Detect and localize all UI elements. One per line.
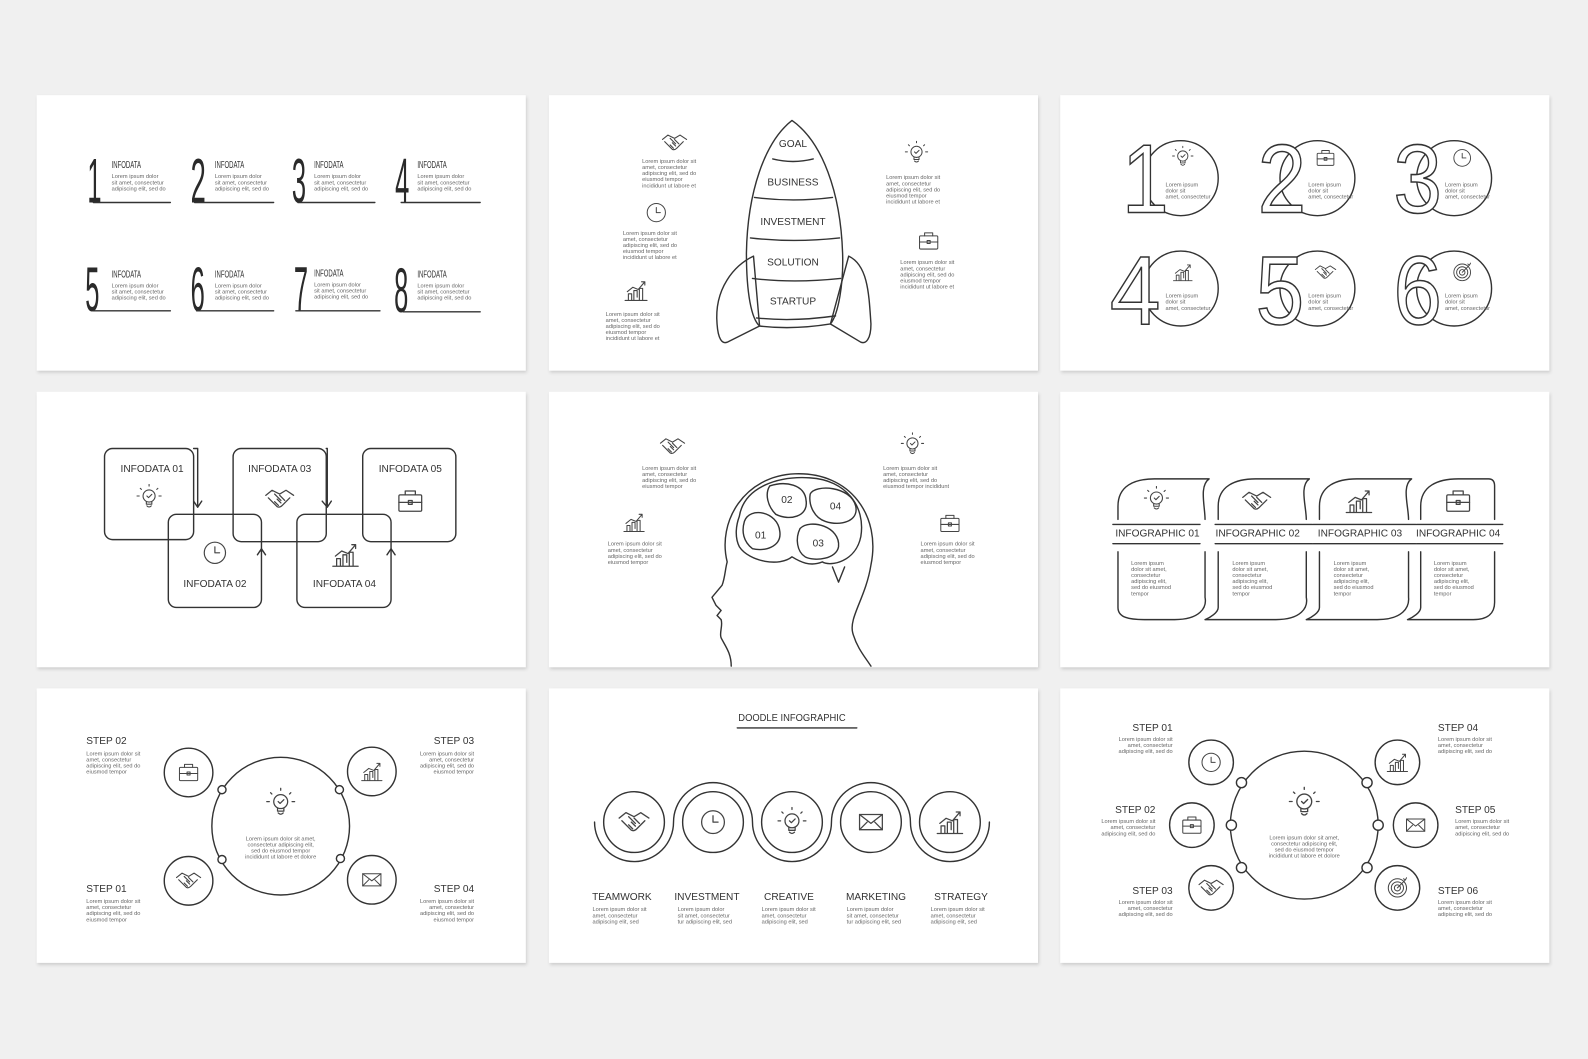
text: briefcase: Lorem ipsum dolor sit bbox=[921, 542, 975, 548]
icon: bulb with text bbox=[886, 141, 941, 205]
number 1: Lorem ipsum bbox=[1166, 182, 1199, 188]
box 02 bbox=[168, 514, 261, 607]
labels: Lorem ipsum dolor sit bbox=[762, 907, 816, 913]
item 1: adipiscing elit, sed do bbox=[112, 186, 166, 192]
central circle: consectetur adipiscing elit, bbox=[248, 842, 314, 848]
tab 01: dolor sit amet, bbox=[1131, 567, 1167, 573]
panel: infodata boxes bbox=[37, 392, 526, 667]
text: chart: adipiscing elit, sed do bbox=[608, 554, 662, 560]
step labels: Lorem ipsum dolor sit bbox=[1438, 900, 1492, 906]
icon: clock with text: amet, consectetur bbox=[623, 237, 668, 243]
text: briefcase: eiusmod tempor bbox=[921, 560, 961, 566]
item 3: INFODATA bbox=[314, 160, 344, 171]
step labels: adipiscing elit, sed do bbox=[1455, 831, 1509, 837]
panel: head with brain bbox=[549, 392, 1038, 667]
step labels: STEP 05 bbox=[1455, 805, 1496, 816]
rocket shape bbox=[717, 120, 871, 343]
number 4: amet, consectetur bbox=[1166, 306, 1211, 312]
box 03: INFODATA 03 bbox=[248, 464, 312, 475]
text: handshake bbox=[642, 439, 697, 490]
tab 04: INFOGRAPHIC 04 bbox=[1416, 529, 1501, 540]
icon: handshake with text: amet, consectetur bbox=[642, 165, 687, 171]
icon: chart with text: Lorem ipsum dolor sit bbox=[606, 312, 660, 318]
icon: briefcase with text: eiusmod tempor bbox=[900, 278, 941, 284]
tab 02: Lorem ipsum bbox=[1232, 561, 1265, 567]
labels: amet, consectetur bbox=[931, 913, 976, 919]
arrows bbox=[194, 449, 395, 555]
item 2: Lorem ipsum dolor bbox=[215, 174, 262, 180]
item 6: sit amet, consectetur bbox=[215, 290, 267, 296]
panel: outlined numbers 1-6 bbox=[1060, 95, 1549, 371]
step labels: Lorem ipsum dolor sit bbox=[1119, 900, 1173, 906]
step labels: amet, consectetur bbox=[1128, 906, 1173, 912]
number 2: dolor sit bbox=[1308, 188, 1329, 194]
tab 04: adipiscing elit, bbox=[1434, 579, 1470, 585]
item 3: 3 bbox=[292, 146, 306, 216]
text: chart: Lorem ipsum dolor sit bbox=[608, 542, 662, 548]
step labels: STEP 02 bbox=[1115, 805, 1156, 816]
step labels: amet, consectetur bbox=[429, 905, 474, 911]
item 7: sit amet, consectetur bbox=[314, 289, 366, 295]
rocket shape: INVESTMENT bbox=[760, 217, 826, 228]
item 2: INFODATA bbox=[215, 160, 244, 171]
tab 01: INFOGRAPHIC 01 bbox=[1115, 529, 1200, 540]
text: bulb: adipiscing elit, sed do bbox=[883, 478, 937, 484]
icon: briefcase with text bbox=[900, 233, 955, 291]
step labels: STEP 06 bbox=[1438, 886, 1479, 897]
step labels: STEP 04 bbox=[434, 884, 474, 895]
text: handshake: Lorem ipsum dolor sit bbox=[642, 466, 697, 472]
item 6: INFODATA bbox=[215, 269, 244, 280]
step labels: eiusmod tempor bbox=[434, 769, 474, 775]
number 3: 3 bbox=[1393, 125, 1442, 234]
item 2: sit amet, consectetur bbox=[215, 180, 267, 186]
head outline: 03 bbox=[813, 539, 824, 550]
rocket shape: SOLUTION bbox=[767, 257, 819, 268]
icon: clock with text: eiusmod tempor bbox=[623, 249, 664, 255]
tab 03: tempor bbox=[1334, 591, 1351, 597]
central circle bbox=[1226, 751, 1383, 899]
step labels: Lorem ipsum dolor sit bbox=[1119, 737, 1173, 743]
icon: clock with text: incididunt ut labore et bbox=[623, 255, 677, 261]
labels: Lorem ipsum dolor bbox=[678, 907, 725, 913]
tab 01: tempor bbox=[1131, 591, 1149, 597]
item 5 bbox=[85, 255, 170, 325]
icon: bulb with text: amet, consectetur bbox=[886, 181, 931, 187]
number 2: amet, consectetur bbox=[1308, 194, 1353, 200]
step labels: Lorem ipsum dolor sit bbox=[420, 751, 474, 757]
step labels: adipiscing elit, sed do bbox=[1119, 912, 1173, 918]
icon: briefcase with text: amet, consectetur bbox=[900, 266, 945, 272]
step labels: STEP 04 bbox=[1438, 723, 1479, 734]
item 1 bbox=[87, 146, 170, 216]
icon circles bbox=[164, 747, 396, 905]
panel: four steps cycle bbox=[37, 688, 526, 963]
icon: bulb with text: Lorem ipsum dolor sit bbox=[886, 175, 941, 181]
icon circles bbox=[604, 792, 980, 852]
step labels: amet, consectetur bbox=[1438, 743, 1483, 749]
central circle bbox=[212, 757, 350, 895]
step labels: STEP 02 bbox=[86, 736, 127, 747]
step labels: adipiscing elit, sed do bbox=[86, 911, 140, 917]
item 3: Lorem ipsum dolor bbox=[314, 174, 361, 180]
wave line bbox=[595, 783, 989, 862]
rocket shape: BUSINESS bbox=[767, 177, 819, 188]
icon: handshake with text: eiusmod tempor bbox=[642, 177, 683, 183]
text: bulb: amet, consectetur bbox=[883, 472, 928, 478]
number 4: Lorem ipsum bbox=[1166, 294, 1199, 300]
labels: MARKETING bbox=[846, 892, 906, 903]
step labels bbox=[1101, 723, 1510, 918]
tab 04: sed do eiusmod bbox=[1434, 585, 1474, 591]
item 3: sit amet, consectetur bbox=[314, 180, 366, 186]
icon: clock with text: Lorem ipsum dolor sit bbox=[623, 231, 677, 237]
step labels: adipiscing elit, sed do bbox=[1101, 831, 1155, 837]
central circle: incididunt ut labore et dolore bbox=[1269, 854, 1340, 860]
step labels: STEP 01 bbox=[86, 884, 127, 895]
number 5: dolor sit bbox=[1308, 300, 1329, 306]
panel: six steps cycle bbox=[1060, 688, 1549, 963]
labels: amet, consectetur bbox=[762, 913, 807, 919]
text: briefcase bbox=[921, 515, 975, 566]
tab 02: consectetur bbox=[1232, 573, 1262, 579]
number 2 bbox=[1258, 125, 1353, 234]
head outline: 01 bbox=[755, 531, 767, 542]
labels: adipiscing elit, sed bbox=[762, 919, 808, 925]
item 5: adipiscing elit, sed do bbox=[112, 296, 166, 302]
item 8: INFODATA bbox=[417, 269, 447, 280]
icon: clock with text bbox=[623, 203, 677, 261]
icon: handshake with text: incididunt ut labore et bbox=[642, 183, 696, 189]
head outline: 04 bbox=[830, 501, 842, 512]
item 3: adipiscing elit, sed do bbox=[314, 186, 368, 192]
tab 03: dolor sit amet, bbox=[1334, 567, 1370, 573]
text: chart bbox=[608, 514, 662, 566]
text: chart: eiusmod tempor bbox=[608, 560, 648, 566]
text: briefcase: amet, consectetur bbox=[921, 548, 966, 554]
labels: amet, consectetur bbox=[593, 913, 638, 919]
number 1: dolor sit bbox=[1166, 188, 1186, 194]
step labels: amet, consectetur bbox=[1455, 825, 1500, 831]
rocket shape: GOAL bbox=[779, 139, 807, 150]
step labels: eiusmod tempor bbox=[86, 917, 127, 923]
step labels: amet, consectetur bbox=[1110, 825, 1156, 831]
item 4: sit amet, consectetur bbox=[417, 180, 470, 186]
number 2: 2 bbox=[1258, 125, 1306, 234]
box 04: INFODATA 04 bbox=[313, 579, 376, 590]
number 4 bbox=[1110, 236, 1211, 345]
item 7: INFODATA bbox=[314, 268, 344, 279]
step labels: amet, consectetur bbox=[429, 757, 474, 763]
number 1: 1 bbox=[1122, 125, 1169, 234]
item 7: Lorem ipsum dolor bbox=[314, 283, 361, 289]
number 5 bbox=[1256, 236, 1353, 345]
step labels: STEP 03 bbox=[1132, 886, 1173, 897]
step labels: amet, consectetur bbox=[86, 757, 131, 763]
tab 04: Lorem ipsum bbox=[1434, 561, 1467, 567]
step labels: Lorem ipsum dolor sit bbox=[86, 899, 141, 905]
labels: adipiscing elit, sed bbox=[593, 919, 639, 925]
text: handshake: amet, consectetur bbox=[642, 472, 687, 478]
labels: sit amet, consectetur bbox=[847, 913, 899, 919]
labels: adipiscing elit, sed bbox=[931, 919, 977, 925]
step labels: amet, consectetur bbox=[1128, 743, 1173, 749]
labels: CREATIVE bbox=[764, 892, 814, 903]
item 4 bbox=[395, 146, 480, 216]
item 4: adipiscing elit, sed do bbox=[417, 186, 471, 192]
tab 03: adipiscing elit, bbox=[1334, 579, 1370, 585]
step labels: adipiscing elit, sed do bbox=[1438, 749, 1492, 755]
number 6: Lorem ipsum bbox=[1445, 294, 1478, 300]
step labels: eiusmod tempor bbox=[434, 917, 474, 923]
box 02: INFODATA 02 bbox=[183, 579, 247, 590]
central circle: sed do eiusmod tempor bbox=[1275, 847, 1334, 853]
item 2: adipiscing elit, sed do bbox=[215, 186, 269, 192]
icon circles bbox=[1170, 740, 1438, 910]
panel: rocket bbox=[549, 95, 1038, 371]
central circle: Lorem ipsum dolor sit amet, bbox=[246, 836, 316, 842]
item 3 bbox=[292, 146, 375, 216]
item 1: INFODATA bbox=[112, 160, 141, 171]
tab 01: adipiscing elit, bbox=[1131, 579, 1167, 585]
tab 02: dolor sit amet, bbox=[1232, 567, 1268, 573]
head outline: 02 bbox=[781, 495, 793, 506]
rocket shape: STARTUP bbox=[770, 297, 816, 308]
number 6: 6 bbox=[1393, 236, 1442, 345]
text: bulb bbox=[883, 433, 950, 490]
step labels: Lorem ipsum dolor sit bbox=[420, 899, 474, 905]
tab 01 bbox=[1115, 479, 1209, 620]
labels: tur adipiscing elit, sed bbox=[678, 919, 732, 925]
item 6: adipiscing elit, sed do bbox=[215, 296, 269, 302]
central circle: incididunt ut labore et dolore bbox=[245, 855, 316, 861]
icon: bulb with text: eiusmod tempor bbox=[886, 193, 927, 199]
tab 02: INFOGRAPHIC 02 bbox=[1216, 529, 1300, 540]
tab 03: INFOGRAPHIC 03 bbox=[1318, 529, 1402, 540]
number 3: dolor sit bbox=[1445, 188, 1465, 194]
labels bbox=[592, 892, 988, 925]
head outline bbox=[712, 474, 873, 666]
item 8: sit amet, consectetur bbox=[417, 290, 470, 296]
step labels: eiusmod tempor bbox=[86, 769, 127, 775]
tab 03: Lorem ipsum bbox=[1334, 561, 1367, 567]
item 4: Lorem ipsum dolor bbox=[417, 174, 464, 180]
box 01: INFODATA 01 bbox=[121, 464, 184, 475]
icon: chart with text: eiusmod tempor bbox=[606, 330, 646, 336]
tab 04: tempor bbox=[1434, 591, 1452, 597]
step labels: adipiscing elit, sed do bbox=[1119, 749, 1173, 755]
tab 04: consectetur bbox=[1434, 573, 1463, 579]
icon: bulb with text: incididunt ut labore et bbox=[886, 199, 940, 205]
text: briefcase: adipiscing elit, sed do bbox=[921, 554, 975, 560]
panel: numbered infodata list bbox=[37, 95, 526, 371]
labels: TEAMWORK bbox=[592, 892, 652, 903]
step labels: amet, consectetur bbox=[1438, 906, 1483, 912]
item 4: INFODATA bbox=[417, 160, 447, 171]
number 5: amet, consectetur bbox=[1308, 306, 1353, 312]
step labels: Lorem ipsum dolor sit bbox=[86, 751, 141, 757]
item 2 bbox=[191, 146, 274, 216]
item 6: 6 bbox=[191, 255, 205, 325]
number 6 bbox=[1393, 236, 1490, 345]
item 7 bbox=[294, 255, 380, 325]
box 05 bbox=[363, 449, 456, 542]
text: handshake: eiusmod tempor bbox=[642, 484, 683, 490]
item 4: 4 bbox=[395, 146, 409, 216]
item 6 bbox=[191, 255, 274, 325]
number 3: amet, consectetur bbox=[1445, 194, 1490, 200]
central circle: sed do eiusmod tempor bbox=[251, 848, 310, 854]
item 5: Lorem ipsum dolor bbox=[112, 284, 159, 290]
number 6: dolor sit bbox=[1445, 300, 1465, 306]
item 1: Lorem ipsum dolor bbox=[112, 174, 159, 180]
number 4: dolor sit bbox=[1166, 300, 1186, 306]
item 8: adipiscing elit, sed do bbox=[417, 296, 471, 302]
item 8 bbox=[394, 256, 480, 326]
step labels: amet, consectetur bbox=[86, 905, 131, 911]
central circle: consectetur adipiscing elit, bbox=[1271, 841, 1338, 847]
icon: handshake with text: adipiscing elit, sed do bbox=[642, 171, 696, 177]
labels: Lorem ipsum dolor bbox=[847, 907, 894, 913]
number 3 bbox=[1393, 125, 1490, 234]
step labels: Lorem ipsum dolor sit bbox=[1455, 819, 1510, 825]
box 05: INFODATA 05 bbox=[379, 464, 442, 475]
item 5: INFODATA bbox=[112, 269, 141, 280]
item 7: adipiscing elit, sed do bbox=[314, 295, 368, 301]
tab 02: adipiscing elit, bbox=[1232, 579, 1268, 585]
number 2: Lorem ipsum bbox=[1308, 182, 1341, 188]
step labels: adipiscing elit, sed do bbox=[420, 911, 474, 917]
labels: Lorem ipsum dolor sit bbox=[593, 907, 647, 913]
labels: Lorem ipsum dolor sit bbox=[931, 907, 985, 913]
item 7: 7 bbox=[294, 255, 308, 325]
icon: briefcase with text: Lorem ipsum dolor sit bbox=[900, 260, 955, 266]
item 8: 8 bbox=[394, 256, 408, 326]
icon: chart with text: amet, consectetur bbox=[606, 318, 651, 324]
item 6: Lorem ipsum dolor bbox=[215, 284, 262, 290]
icon: handshake with text: Lorem ipsum dolor sit bbox=[642, 159, 697, 165]
item 2: 2 bbox=[191, 146, 206, 216]
text: bulb: Lorem ipsum dolor sit bbox=[883, 466, 938, 472]
labels: INVESTMENT bbox=[674, 892, 740, 903]
icon: chart with text: adipiscing elit, sed do bbox=[606, 324, 660, 330]
labels: sit amet, consectetur bbox=[678, 913, 730, 919]
number 3: Lorem ipsum bbox=[1445, 182, 1478, 188]
tab 01: sed do eiusmod bbox=[1131, 585, 1171, 591]
number 6: amet, consectetur bbox=[1445, 306, 1490, 312]
step labels: adipiscing elit, sed do bbox=[86, 763, 140, 769]
box 03 bbox=[233, 449, 326, 542]
tab 02: tempor bbox=[1232, 591, 1250, 597]
icon: handshake with text bbox=[642, 135, 697, 189]
step labels: adipiscing elit, sed do bbox=[420, 763, 474, 769]
item 8: Lorem ipsum dolor bbox=[417, 284, 464, 290]
icon: chart with text bbox=[606, 282, 660, 342]
tab 03 bbox=[1306, 479, 1412, 620]
number 1 bbox=[1122, 125, 1211, 234]
text: chart: amet, consectetur bbox=[608, 548, 653, 554]
tab 04: dolor sit amet, bbox=[1434, 567, 1470, 573]
tab 03: sed do eiusmod bbox=[1334, 585, 1374, 591]
text: bulb: eiusmod tempor incididunt bbox=[883, 484, 950, 490]
icon: chart with text: incididunt ut labore et bbox=[606, 336, 660, 342]
icon: clock with text: adipiscing elit, sed do bbox=[623, 243, 677, 249]
step labels bbox=[86, 736, 474, 923]
icon: briefcase with text: adipiscing elit, sed do bbox=[900, 272, 954, 278]
item 5: 5 bbox=[85, 255, 99, 325]
box 04 bbox=[297, 514, 391, 607]
tab 02 bbox=[1205, 479, 1309, 620]
step labels: Lorem ipsum dolor sit bbox=[1101, 819, 1156, 825]
item 5: sit amet, consectetur bbox=[112, 290, 164, 296]
tab 04 bbox=[1408, 479, 1501, 620]
labels: tur adipiscing elit, sed bbox=[847, 919, 901, 925]
number 5: Lorem ipsum bbox=[1308, 294, 1341, 300]
item 1: 1 bbox=[87, 146, 101, 216]
number 1: amet, consectetur bbox=[1166, 194, 1211, 200]
number 5: 5 bbox=[1256, 236, 1304, 345]
title: DOODLE INFOGRAPHIC bbox=[738, 713, 846, 724]
panel: doodle infographic wave bbox=[549, 688, 1038, 963]
tab 03: consectetur bbox=[1334, 573, 1363, 579]
step labels: STEP 01 bbox=[1132, 723, 1173, 734]
icon: briefcase with text: incididunt ut labore et bbox=[900, 285, 955, 291]
number 4: 4 bbox=[1110, 236, 1160, 345]
tab 01: Lorem ipsum bbox=[1131, 561, 1164, 567]
tab 02: sed do eiusmod bbox=[1232, 585, 1272, 591]
step labels: STEP 03 bbox=[434, 736, 474, 747]
step labels: Lorem ipsum dolor sit bbox=[1438, 737, 1492, 743]
step labels: adipiscing elit, sed do bbox=[1438, 912, 1492, 918]
box 01 bbox=[105, 449, 194, 540]
icon: bulb with text: adipiscing elit, sed do bbox=[886, 187, 940, 193]
tab 01: consectetur bbox=[1131, 573, 1160, 579]
labels: STRATEGY bbox=[934, 892, 988, 903]
text: handshake: adipiscing elit, sed do bbox=[642, 478, 696, 484]
central circle: Lorem ipsum dolor sit amet, bbox=[1269, 835, 1340, 841]
item 1: sit amet, consectetur bbox=[112, 180, 164, 186]
panel: infographic tabs bbox=[1060, 392, 1549, 667]
